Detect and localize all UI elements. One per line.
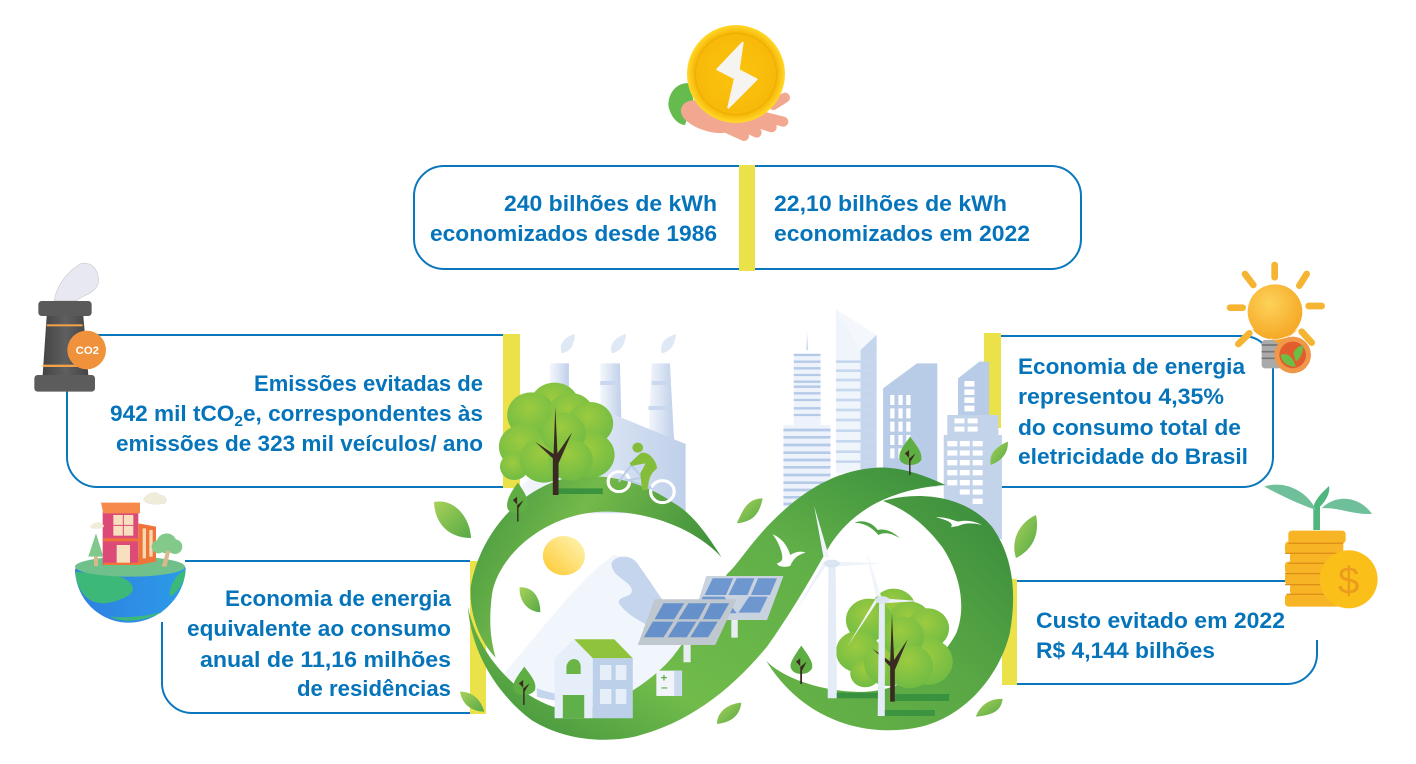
leaf: right of infinity xyxy=(1014,515,1037,558)
leaves xyxy=(460,442,1008,724)
sun xyxy=(543,536,585,575)
central illustration: infinity with city and clean energy xyxy=(460,309,1013,740)
tree: top left xyxy=(499,383,615,495)
text: household equivalent: Economia de energia xyxy=(225,586,452,611)
text: saved in 2022 xyxy=(774,191,1030,246)
text: avoided cost: R$ 4,144 bilhões xyxy=(1036,638,1215,663)
text: share of consumption: do consumo total de xyxy=(1018,415,1241,440)
infinity ribbon: right loop xyxy=(766,496,1013,730)
text: 323 mil vehicles: emissões de 323 mil veículos/ ano xyxy=(116,431,483,456)
text: saved in 2022: economizados em 2022 xyxy=(774,221,1030,246)
text: saved since 1986: 240 bilhões de kWh xyxy=(504,191,717,216)
text: share of consumption xyxy=(1018,354,1248,469)
text: household equivalent: equivalente ao consumo xyxy=(187,616,451,641)
lightning bolt xyxy=(717,43,757,108)
icon: CO2 chimney: CO2 xyxy=(76,345,99,357)
small trees xyxy=(507,437,921,705)
text: 942 mil tCO2e: 942 mil tCO xyxy=(110,401,231,426)
text: household equivalent: anual de 11,16 milhões xyxy=(200,647,451,672)
tree: right xyxy=(836,589,953,702)
battery: − xyxy=(661,683,668,695)
icon: coin stack with sprout xyxy=(1264,485,1378,608)
panel: avoided emissions xyxy=(67,334,520,488)
icon: coin stack with sprout: $ xyxy=(1338,559,1359,602)
leaf: left of infinity xyxy=(434,501,471,538)
text: saved since 1986: economizados desde 1986 xyxy=(430,221,717,246)
text: share of consumption: eletricidade do Brasil xyxy=(1018,444,1248,469)
battery xyxy=(656,671,682,696)
text: share of consumption: representou 4,35% xyxy=(1018,384,1224,409)
text: saved since 1986 xyxy=(430,191,717,246)
panel: share of electricity consumption xyxy=(984,333,1273,487)
text: 942 mil tCO2e: e, correspondentes às xyxy=(243,401,483,426)
hand xyxy=(683,98,785,136)
panel: avoided cost xyxy=(1002,579,1317,685)
rays xyxy=(1230,265,1322,344)
city skyline xyxy=(783,309,1002,540)
text: avoided emissions: Emissões evitadas de xyxy=(254,371,483,396)
mountain xyxy=(503,555,688,703)
icon: CO2 chimney xyxy=(34,263,106,392)
text: 942 mil tCO2e: 2 xyxy=(234,413,243,430)
wind turbines xyxy=(792,506,935,716)
text: share of consumption: Economia de energia xyxy=(1018,354,1246,379)
battery: + xyxy=(661,673,667,685)
infinity ribbon: upper left xyxy=(471,476,722,658)
house xyxy=(555,639,633,718)
factory xyxy=(521,334,686,513)
coins xyxy=(1285,531,1346,607)
cyclist xyxy=(608,443,674,503)
text: household equivalent xyxy=(187,586,452,701)
birds xyxy=(772,517,982,567)
text: avoided cost xyxy=(1036,608,1285,663)
icon: coin in hand xyxy=(668,25,785,136)
solar panels xyxy=(638,576,783,662)
cuff xyxy=(668,83,693,125)
text: avoided cost: Custo evitado em 2022 xyxy=(1036,608,1285,633)
infinity ribbon: centre sweep xyxy=(468,468,946,740)
sprout xyxy=(1313,486,1329,530)
text: saved in 2022: 22,10 bilhões de kWh xyxy=(774,191,1007,216)
panel: 240 and 22,10 billion kWh xyxy=(414,165,1081,271)
text: household equivalent: de residências xyxy=(297,676,451,701)
icon: house on globe xyxy=(75,493,186,623)
panel: household equivalent xyxy=(162,561,486,714)
icon: light bulb with leaf badge xyxy=(1230,265,1322,373)
coin xyxy=(687,25,785,123)
